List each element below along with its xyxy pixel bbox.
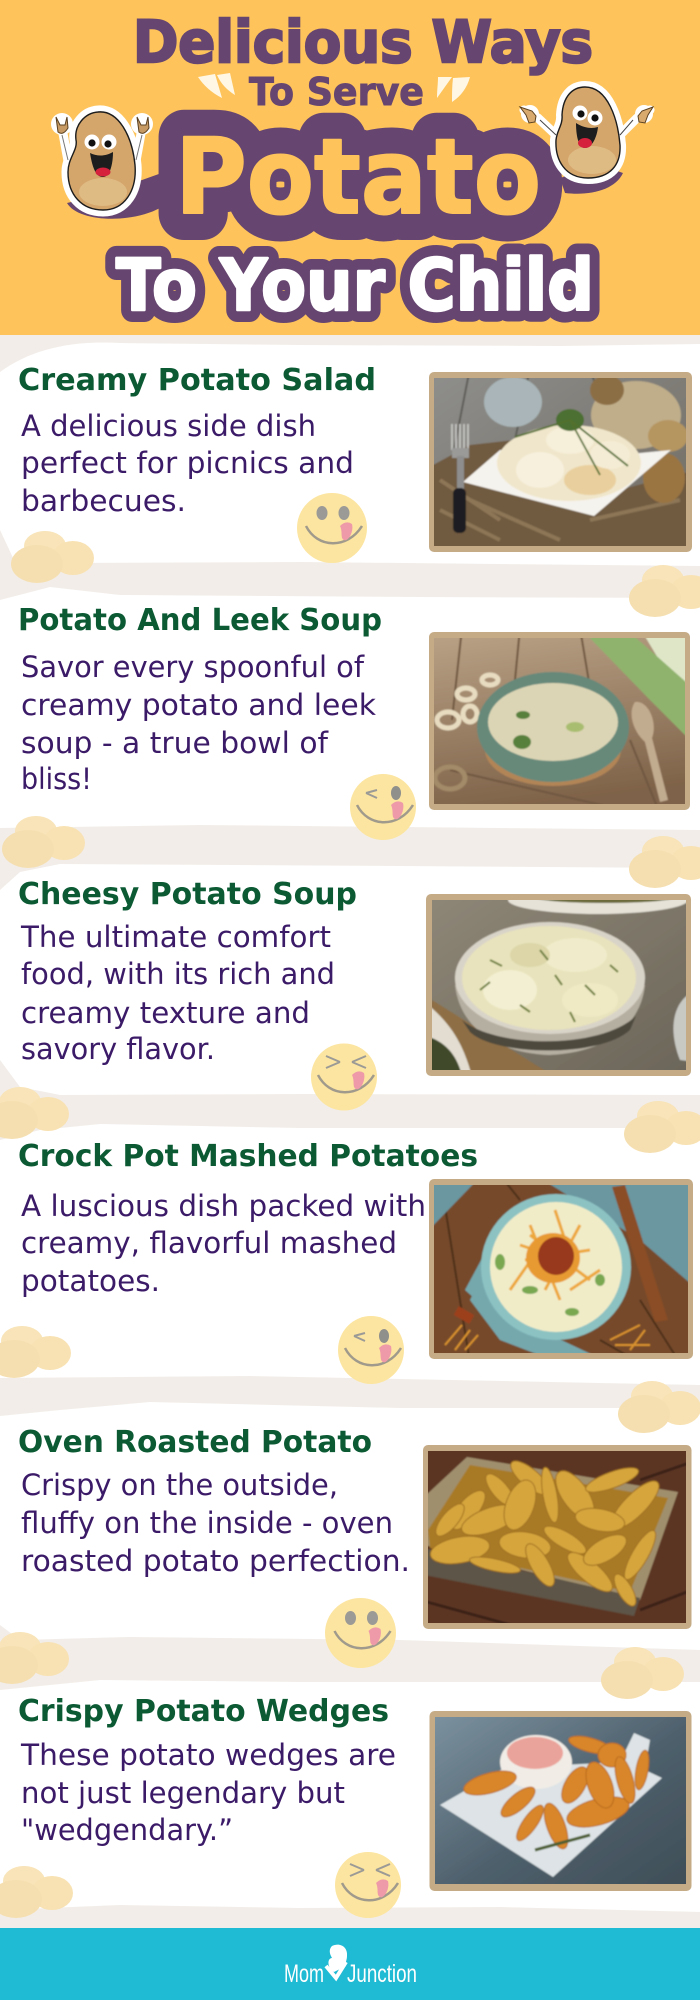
description: bliss!: [21, 762, 92, 796]
photo: mashed potato bowl: [422, 886, 696, 1080]
description: [20, 920, 335, 1066]
title word: Potato: Potato: [175, 116, 541, 238]
description: These potato wedges are: [20, 1738, 396, 1772]
icon: winking smiley: [350, 774, 416, 840]
footer bar: [0, 1928, 700, 2000]
description: soup - a true bowl of: [21, 726, 329, 760]
title word backing: Potato: Potato: [175, 116, 541, 238]
title line: To Serve: To Serve: [249, 70, 424, 114]
photo: potato wedges on board: [425, 1707, 696, 1894]
description: savory flavor.: [21, 1032, 215, 1066]
icon: laughing smiley: [335, 1852, 401, 1918]
description: Savor every spoonful of: [21, 650, 365, 684]
icon: right potato mascot: [520, 87, 653, 178]
title line backing: To Your Child: To Your Child: [116, 244, 594, 327]
icon: winking smiley: [338, 1316, 404, 1384]
icon: closing quote marks: [437, 77, 470, 102]
description: barbecues.: [21, 484, 186, 518]
icon: smiley with tongue: [325, 1598, 396, 1668]
title line: To Your Child: To Your Child: [116, 244, 594, 327]
description: food, with its rich and: [21, 957, 335, 991]
icon: left potato mascot: [51, 112, 153, 210]
logo: MomJunction: Junction: [347, 1960, 417, 1988]
description: A luscious dish packed with: [21, 1189, 426, 1223]
panel: crock pot mashed potatoes: [18, 1139, 698, 1384]
photo: leek soup: [424, 628, 695, 814]
description: [21, 1468, 410, 1578]
description: [21, 1189, 426, 1298]
description: [21, 409, 354, 518]
panel: oven roasted potato: [18, 1425, 692, 1668]
description: creamy, flavorful mashed: [21, 1226, 397, 1260]
heading: Creamy Potato Salad: [18, 363, 376, 398]
icon: opening quote marks: [198, 73, 235, 98]
description: The ultimate comfort: [20, 920, 331, 954]
description: creamy texture and: [21, 996, 310, 1030]
title line: Delicious Ways: Delicious Ways: [133, 8, 593, 76]
heading: Crock Pot Mashed Potatoes: [18, 1139, 478, 1174]
logo: MomJunction: Mom: [284, 1960, 324, 1988]
icon: laughing smiley: [311, 1044, 377, 1110]
description: roasted potato perfection.: [21, 1544, 410, 1578]
description: potatoes.: [21, 1264, 160, 1298]
panel: crispy potato wedges: [18, 1694, 696, 1918]
description: [21, 650, 376, 796]
photo: potato salad: [424, 368, 696, 556]
title block: [67, 8, 623, 327]
icon: smiley with tongue: [297, 493, 367, 563]
description: Crispy on the outside,: [21, 1468, 338, 1502]
icon: potato clusters, left side: [0, 531, 94, 1918]
heading: Potato And Leek Soup: [18, 603, 382, 638]
panel: creamy potato salad: [18, 363, 696, 563]
description: A delicious side dish: [21, 409, 316, 443]
logo: MomJunction: [284, 1945, 417, 1988]
description: perfect for picnics and: [21, 446, 354, 480]
description: [20, 1738, 396, 1847]
photo: roasted potatoes in tray: [420, 1445, 692, 1633]
description: fluffy on the inside - oven: [21, 1506, 393, 1540]
icon: potato clusters, right side: [601, 565, 700, 1699]
description: not just legendary but: [21, 1776, 345, 1810]
description: "wedgendary.”: [21, 1813, 233, 1847]
panel: potato and leek soup: [18, 603, 695, 840]
mascot shadows: [67, 165, 623, 219]
heading: Crispy Potato Wedges: [18, 1694, 389, 1729]
description: creamy potato and leek: [21, 688, 376, 722]
heading: Oven Roasted Potato: [18, 1425, 372, 1460]
header band: [0, 0, 700, 335]
heading: Cheesy Potato Soup: [18, 877, 357, 912]
photo: loaded potato soup: [424, 1175, 698, 1363]
panel: cheesy potato soup: [18, 877, 696, 1110]
